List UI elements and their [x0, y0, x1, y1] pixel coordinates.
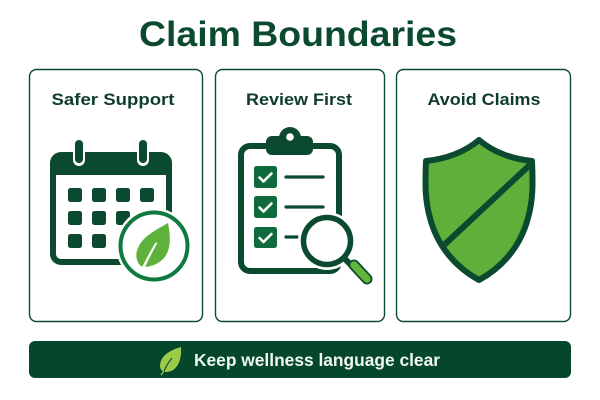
panel: avoid claims: [396, 70, 570, 322]
heading: avoid claims: Avoid Claims: [428, 90, 540, 109]
icon: banner leaf: [160, 347, 181, 375]
icon: calendar with leaf badge: [50, 136, 192, 284]
banner text: Keep wellness language clear: [194, 350, 440, 370]
heading: safer support: Safer Support: [52, 90, 175, 109]
title: Claim Boundaries: [139, 15, 457, 54]
banner: [29, 341, 571, 378]
heading: review first: Review First: [246, 90, 352, 109]
panel: safer support: [30, 70, 202, 322]
icon: clipboard checklist with magnifier: [241, 127, 367, 279]
icon: shield with slash: [425, 140, 533, 280]
panel: review first: [216, 70, 384, 322]
